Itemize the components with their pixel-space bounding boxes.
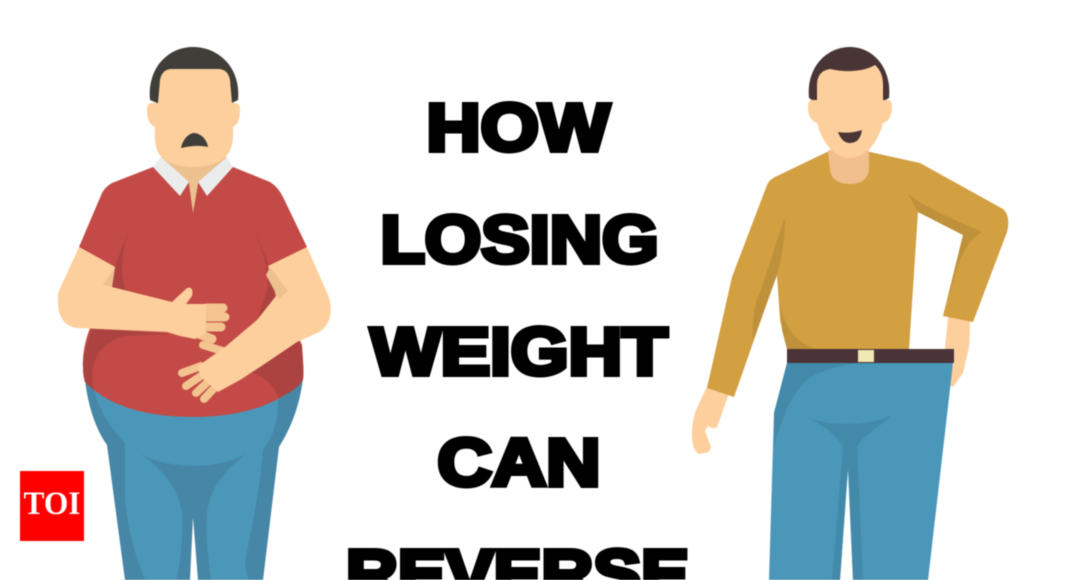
trousers: overweight man: [85, 378, 303, 580]
title line: LOSING: LOSING: [380, 202, 658, 278]
trousers: slim man: [769, 363, 953, 580]
moustache: [181, 133, 208, 148]
illustration: slim man: [692, 47, 1008, 580]
head: overweight man: [147, 47, 240, 167]
sweater: [707, 152, 1008, 397]
collar and placket: [153, 157, 233, 213]
logo: TOI: TOI: [24, 486, 80, 522]
neck: [828, 150, 869, 184]
title line: WEIGHT: WEIGHT: [370, 314, 668, 390]
right hand: [945, 308, 970, 387]
logo: TOI: [20, 471, 84, 541]
shirt: red polo: [79, 167, 307, 417]
head: slim man: [808, 47, 892, 158]
title line: CAN: CAN: [438, 426, 600, 500]
right arm and hand, lower: [182, 247, 331, 399]
title: [346, 90, 689, 580]
belt with buckle: [787, 349, 954, 363]
smiling mouth: [838, 130, 862, 143]
title line: HOW: HOW: [426, 90, 610, 166]
left hand: [692, 380, 731, 454]
left arm and hand, upper: [58, 247, 225, 339]
illustration: overweight man: [58, 47, 331, 580]
